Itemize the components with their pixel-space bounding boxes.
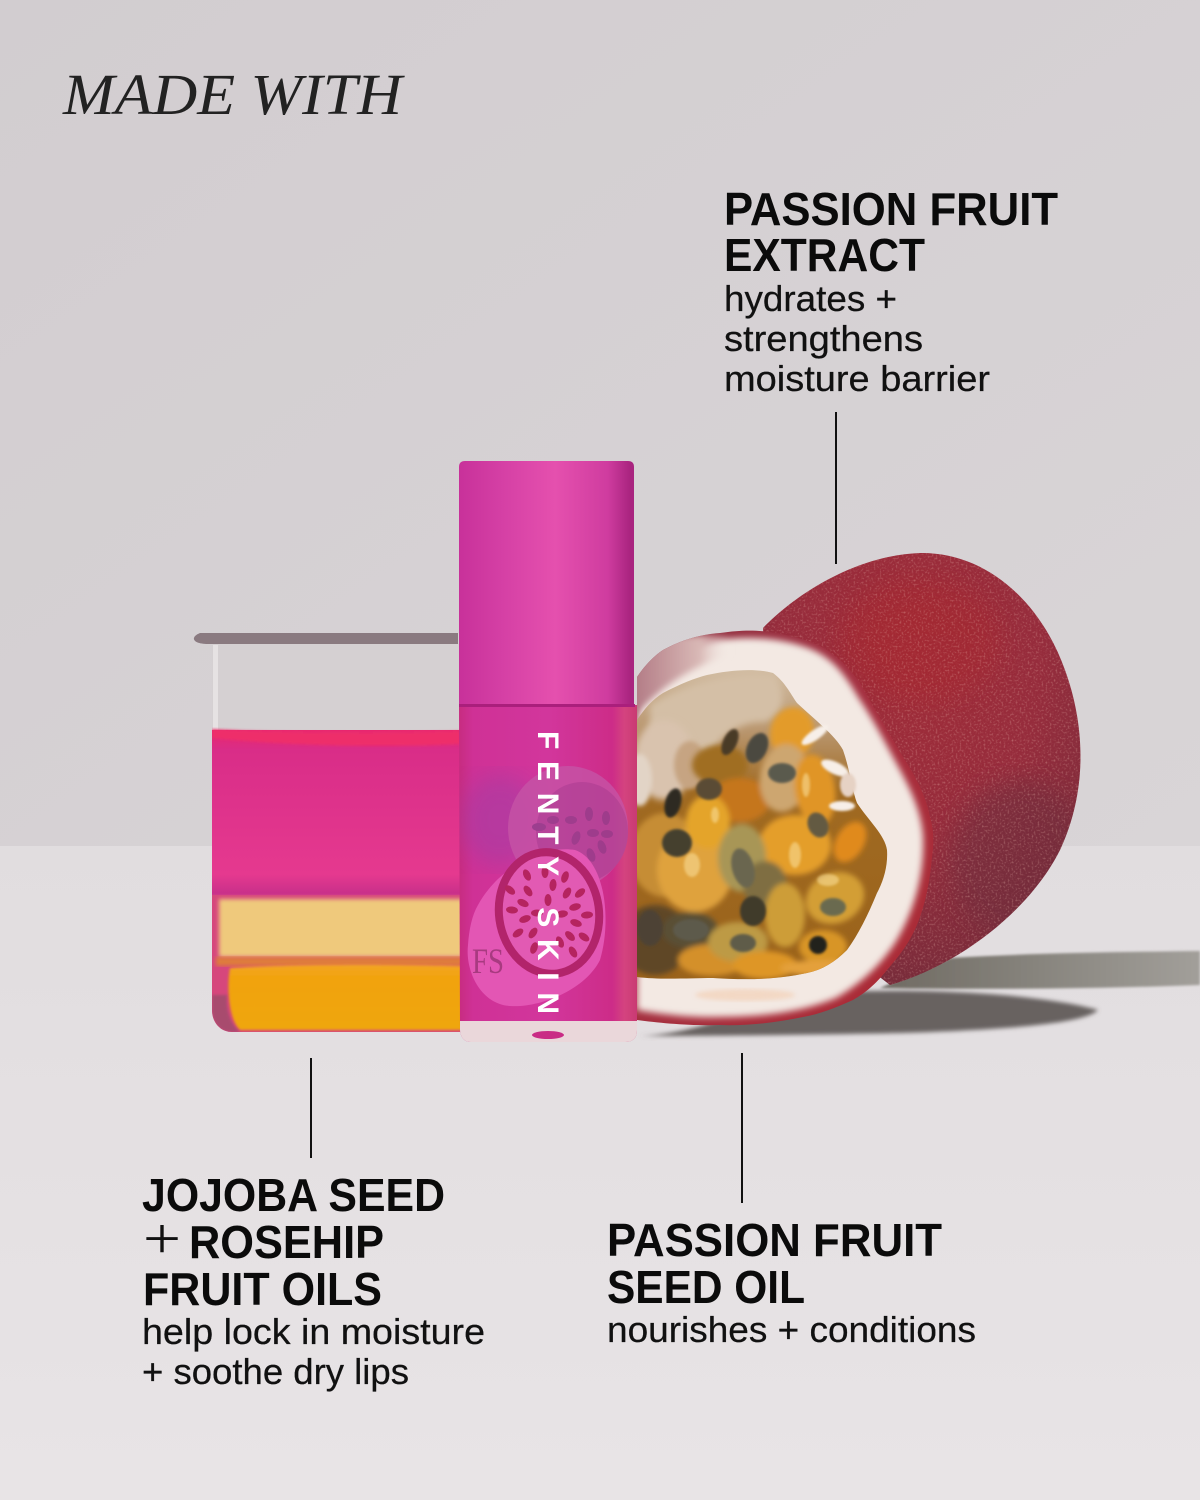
lip oil bottle bbox=[459, 461, 638, 1043]
heading: SEED OIL bbox=[607, 1261, 805, 1313]
FS logo: FS bbox=[472, 941, 504, 981]
juice highlights bbox=[684, 773, 839, 886]
orange separator bbox=[216, 957, 464, 966]
heading: + bbox=[143, 1206, 181, 1271]
front fruit ring bbox=[491, 846, 607, 980]
description: moisture barrier bbox=[724, 358, 990, 399]
beaker contents bbox=[212, 729, 464, 1035]
description bbox=[724, 278, 990, 399]
cut half outer rind bbox=[637, 631, 933, 1025]
pink liquid bbox=[212, 730, 460, 900]
heading bbox=[142, 1169, 445, 1315]
shadow: fruit long shadow bbox=[880, 951, 1200, 989]
cap seam bbox=[459, 704, 635, 707]
heading: ROSEHIP bbox=[189, 1216, 384, 1268]
clear bottom bbox=[460, 1021, 638, 1043]
leader line: extract bbox=[835, 412, 837, 564]
purple haze bbox=[460, 775, 540, 865]
whole fruit skin bbox=[760, 550, 1090, 990]
orange pulp mass bbox=[620, 704, 873, 979]
background table surface bbox=[0, 846, 1200, 1500]
fibres bbox=[799, 722, 856, 811]
cavity pulp bbox=[637, 670, 888, 980]
white pith bbox=[637, 638, 923, 1017]
callout: jojoba seed + rosehip fruit oils bbox=[142, 1169, 485, 1392]
beaker rim bbox=[194, 633, 458, 644]
heading bbox=[607, 1214, 942, 1313]
bottle cap bbox=[459, 461, 634, 705]
pith rose shading upper left bbox=[637, 633, 728, 717]
left glass wall bbox=[213, 645, 218, 730]
pale yellow layer bbox=[219, 899, 464, 957]
inner cavity membrane bbox=[628, 674, 782, 806]
leader line: jojoba bbox=[310, 1058, 312, 1158]
liquid meniscus bbox=[212, 729, 460, 746]
seeds bbox=[637, 726, 846, 954]
description bbox=[142, 1311, 485, 1392]
description: strengthens bbox=[724, 318, 923, 359]
heading: PASSION FRUIT bbox=[607, 1214, 942, 1266]
beaker bbox=[194, 633, 464, 1035]
leader line: seed oil bbox=[741, 1053, 743, 1203]
background wall bbox=[0, 0, 1200, 847]
dark bottom corner bbox=[212, 995, 240, 1032]
heading: JOJOBA SEED bbox=[142, 1169, 445, 1221]
heading bbox=[724, 183, 1058, 281]
heading: EXTRACT bbox=[724, 229, 925, 281]
description: nourishes + conditions bbox=[607, 1309, 976, 1350]
lower pink base bbox=[212, 895, 460, 1035]
heading: FRUIT OILS bbox=[143, 1263, 382, 1315]
shadow: fruit contact shadow bbox=[640, 991, 1098, 1036]
passion fruit bbox=[620, 550, 1090, 1025]
description: hydrates + bbox=[724, 278, 897, 319]
fruit seeds bbox=[503, 866, 593, 959]
bottle base bbox=[459, 705, 637, 1042]
description: help lock in moisture bbox=[142, 1311, 485, 1352]
title: MADE WITH bbox=[62, 62, 405, 127]
beaker glass upper bbox=[212, 643, 460, 733]
brand name: FENTY SKIN bbox=[531, 731, 564, 1014]
callout: passion fruit extract bbox=[724, 183, 1058, 399]
description: + soothe dry lips bbox=[142, 1351, 409, 1392]
front fruit disc bbox=[468, 849, 606, 1006]
cut half flesh bbox=[630, 635, 923, 1017]
yellow oil layer bbox=[228, 965, 464, 1030]
back fruit graphic bbox=[508, 766, 628, 890]
heading: PASSION FRUIT bbox=[724, 183, 1058, 235]
callout: passion fruit seed oil bbox=[607, 1214, 976, 1350]
clear bottom magenta reflection bbox=[532, 1031, 564, 1039]
pith bottom warm tint bbox=[695, 989, 795, 1001]
